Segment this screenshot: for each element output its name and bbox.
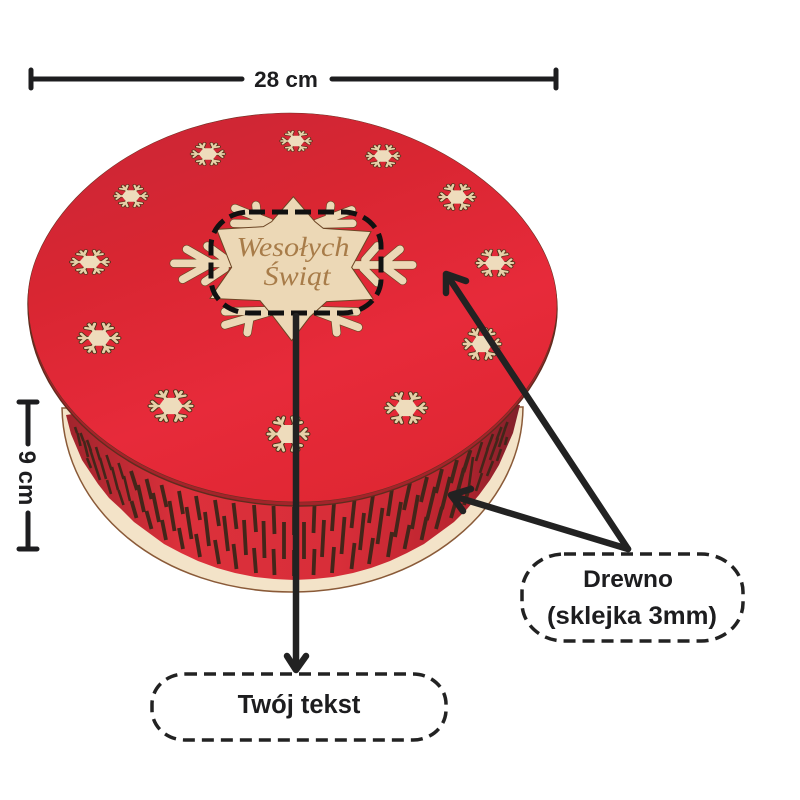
- callout text: plywood thickness: (sklejka 3mm): [547, 602, 717, 630]
- large snowflake name plate: [174, 197, 413, 341]
- dimension: height 9 cm: [13, 402, 40, 549]
- arrow: text area to label: [287, 316, 306, 670]
- arrow: wood label to lid: [446, 274, 628, 549]
- callout: your text: [152, 674, 446, 740]
- side wall slots: [75, 422, 508, 576]
- ring of small snowflakes: [71, 131, 513, 452]
- callout text: Drewno: Drewno: [583, 566, 673, 593]
- callout: wood plywood: [522, 554, 743, 641]
- label: 9 cm: 9 cm: [13, 451, 40, 505]
- dashed custom text area: [211, 212, 381, 313]
- red slotted side wall: [66, 380, 520, 580]
- wooden box: [28, 113, 557, 592]
- label: 28 cm: 28 cm: [254, 67, 318, 92]
- engraved text: Świąt: Świąt: [264, 261, 332, 291]
- lid lower layer: [28, 117, 557, 506]
- callout text: Twój tekst: Twój tekst: [238, 691, 361, 719]
- engraved text: Wesołych: Wesołych: [236, 232, 350, 262]
- red lid: [28, 113, 557, 502]
- arrow: wood label to side wall: [451, 489, 628, 549]
- dimension: width 28 cm: [31, 67, 556, 92]
- box base: [62, 407, 523, 592]
